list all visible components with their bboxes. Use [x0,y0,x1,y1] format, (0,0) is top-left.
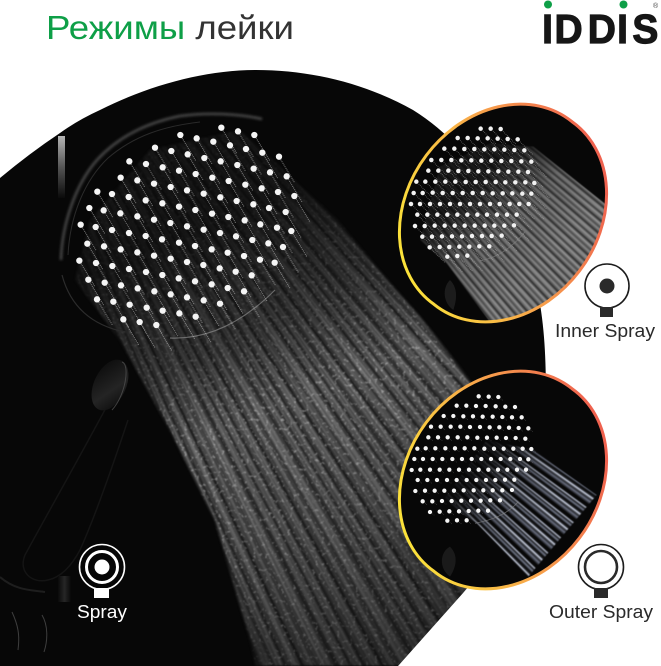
label: outer spray: Outer Spray [549,602,653,622]
main water spray [76,132,472,666]
inset photo: outer spray [398,370,608,590]
icon: inner spray [585,264,629,317]
logo: IDDIS: IDDIS [542,7,658,52]
inset photo: inner spray [398,102,608,324]
shower head nozzles [79,128,309,350]
icon: outer spray [578,544,624,598]
main photo: black shower background [0,70,546,666]
handle and bracket [0,354,136,652]
logo: IDDIS: ® [653,2,659,10]
label: spray: Spray [77,602,127,622]
shower head rim [61,114,275,338]
title: Режимы лейки [46,9,294,46]
label: inner spray: Inner Spray [555,321,655,341]
icon: spray [80,544,124,598]
